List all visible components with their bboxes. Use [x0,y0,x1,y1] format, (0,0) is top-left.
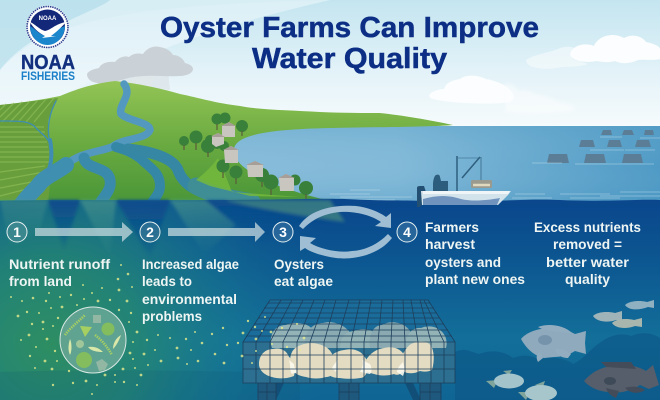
step 2 marker: 2 [146,224,154,240]
land: hill and peninsula [0,81,453,203]
algae magnified circle [60,307,126,373]
arrow: step 2 to 3 [168,222,265,242]
step 3 marker: 3 [279,224,287,240]
logo: NOAA Fisheries: FISHERIES [21,69,75,83]
text: step 4: harvest [425,236,475,252]
motor [417,186,426,207]
fish: large blue [521,325,586,362]
fish group [486,300,659,400]
text: step 2: Increased algae [142,256,239,272]
text: step 3 [274,256,333,289]
fish: pale lower 1 [486,370,524,388]
step 4 marker [397,222,417,242]
cloud: mid right [429,76,514,104]
step 1 marker: 1 [13,224,21,240]
front row of oysters [259,341,434,379]
title [160,12,539,75]
title: Water Quality [252,43,447,75]
logo wordmark: NOAA [21,52,75,74]
trees [179,112,313,195]
algae: squares [93,315,108,371]
sky background [0,0,660,130]
cycle arrow: farmers to oysters [300,234,392,258]
back row of oysters [271,322,447,348]
text: outcome: better water [546,254,630,270]
cloud: upper right [526,35,660,69]
cage body [243,342,455,383]
algae: triangle [80,326,92,337]
fish: small grey 2 [625,300,654,309]
text: step 3: eat algae [274,273,333,289]
text: step 1: Nutrient runoff [9,256,110,272]
text: step 1: from land [9,273,72,289]
text: outcome: removed = [553,236,622,252]
cycle arrow: oysters to farmers [299,206,391,229]
logo: NOAA Fisheries [21,6,75,83]
boat crane and rigging [457,156,481,192]
cage legs [258,383,441,400]
text: step 2: problems [142,308,202,324]
fish: dark grouper [584,362,659,398]
village: houses and trees [179,112,313,199]
boat [417,156,511,207]
text: step 2 [142,256,239,324]
surface ripples [325,137,660,200]
seabed silhouette [455,333,660,400]
farmland fields [0,98,58,203]
text: step 3: Oysters [274,256,324,272]
cloud: low right [505,84,575,114]
cage wire mesh [243,300,455,400]
underwater area [0,199,660,400]
text: step 4: Farmers [425,219,479,235]
houses [212,123,294,191]
fish: small tan [612,318,642,328]
algae: diatoms [68,335,121,355]
step 1 marker [7,222,27,242]
text: step 4: oysters and [425,254,501,270]
text: outcome [534,219,641,287]
step 3 marker [273,222,293,242]
text: step 4 [425,219,525,287]
text: outcome: quality [565,271,610,287]
hull [421,191,511,205]
text: outcome: Excess nutrients [534,219,641,235]
nutrient runoff plumes [0,200,345,258]
distant oyster farm cages [547,130,654,163]
text: step 1 [9,256,110,289]
sea surface and bay [0,126,660,206]
fish: pale lower 2 [518,381,557,400]
text: step 2: leads to [142,273,192,289]
arrow: step 1 to 2 [35,222,133,242]
rain cloud [87,46,193,90]
rivers [0,84,252,206]
step 2 marker [140,222,160,242]
logo seal: NOAA [39,16,57,22]
title: Oyster Farms Can Improve [160,12,539,44]
farmer [433,175,448,191]
step 4 marker: 4 [403,224,411,240]
algae: round cells [76,322,114,368]
text: step 4: plant new ones [425,271,525,287]
text: step 2: environmental [142,291,237,307]
fish: small grey 1 [593,311,622,322]
oyster cage [243,300,455,400]
algae: chains [65,315,112,355]
oyster basket [471,180,492,188]
nutrient dots [10,264,305,395]
